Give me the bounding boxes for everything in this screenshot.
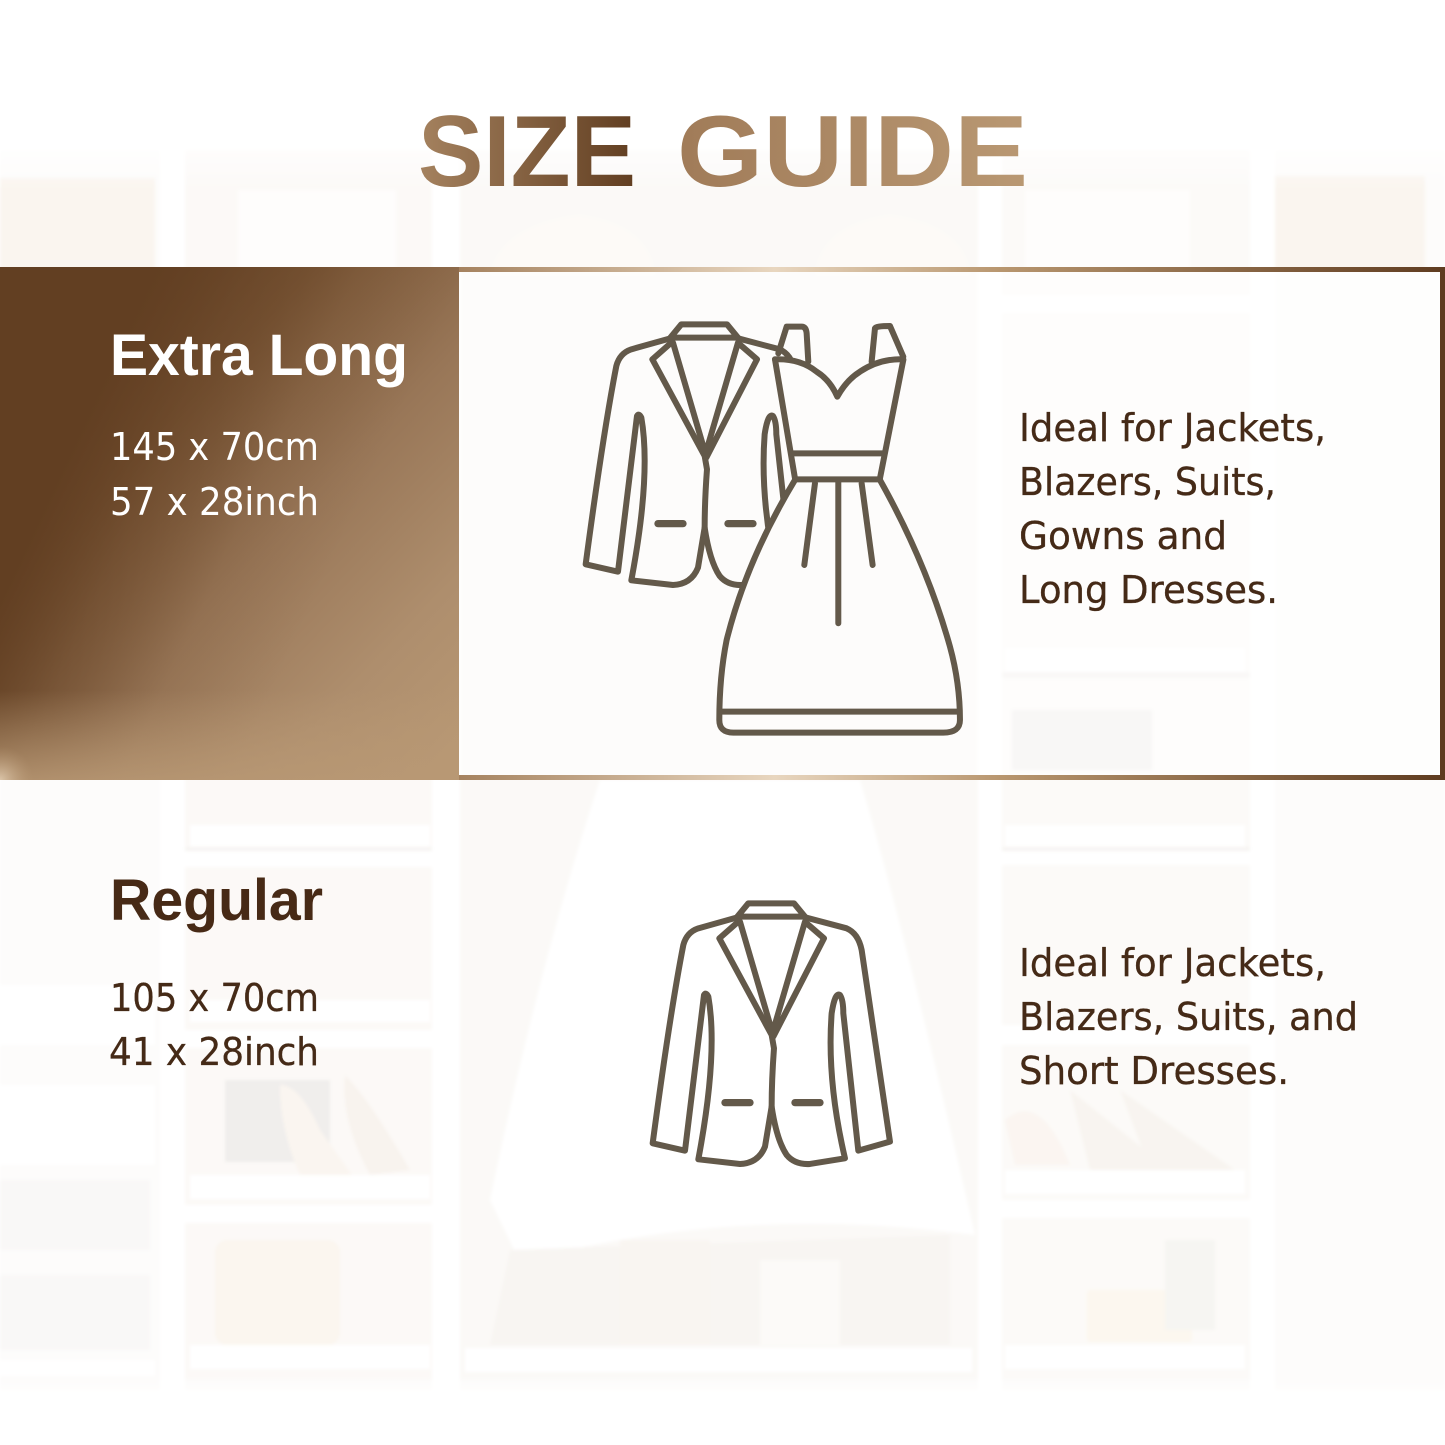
heading: regular: Regular [110,868,323,933]
description: extra long: Blazers, Suits, [1019,460,1276,504]
dimensions: regular: 105 x 70cm [110,976,319,1020]
icon: jacket behind dress [586,324,823,585]
description: extra long: Long Dresses. [1019,568,1278,612]
description: extra long: Ideal for Jackets, [1019,406,1326,450]
description: regular [1019,941,1358,1093]
description: regular: Short Dresses. [1019,1049,1289,1093]
icon: dress [719,326,960,733]
icon: jacket and dress [586,324,960,733]
icon: jacket [653,903,890,1164]
dimensions: extra long: 145 x 70cm [110,425,319,469]
panel: extra long gradient label block [0,267,459,780]
title: GUIDE [677,96,1028,208]
dimensions: regular: 41 x 28inch [109,1030,319,1074]
frame border [459,267,1445,780]
description: regular: Ideal for Jackets, [1019,941,1326,985]
title: SIZE [418,96,636,208]
title [418,96,1028,208]
description: extra long: Gowns and [1019,514,1227,558]
description: regular: Blazers, Suits, and [1019,995,1358,1039]
dimensions: extra long [110,425,319,524]
description: extra long [1019,406,1326,612]
panel: extra long white area [459,267,1445,779]
heading: extra long: Extra Long [110,323,408,388]
panel: extra long [0,267,1445,780]
dimensions: regular [109,976,319,1074]
panel: regular [109,868,1358,1164]
dimensions: extra long: 57 x 28inch [110,480,319,524]
